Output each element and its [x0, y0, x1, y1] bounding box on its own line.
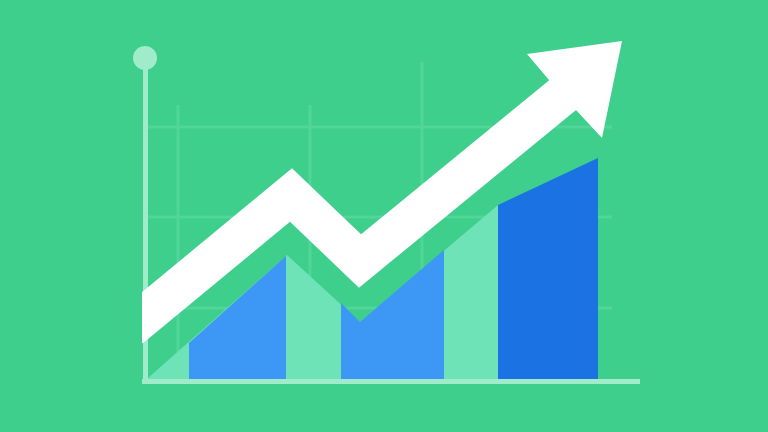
light area — [148, 205, 498, 380]
axes — [133, 46, 640, 384]
arrow — [130, 41, 622, 328]
bar 2 — [341, 250, 444, 380]
bar 3 — [498, 158, 598, 380]
bar 1 — [189, 256, 286, 380]
